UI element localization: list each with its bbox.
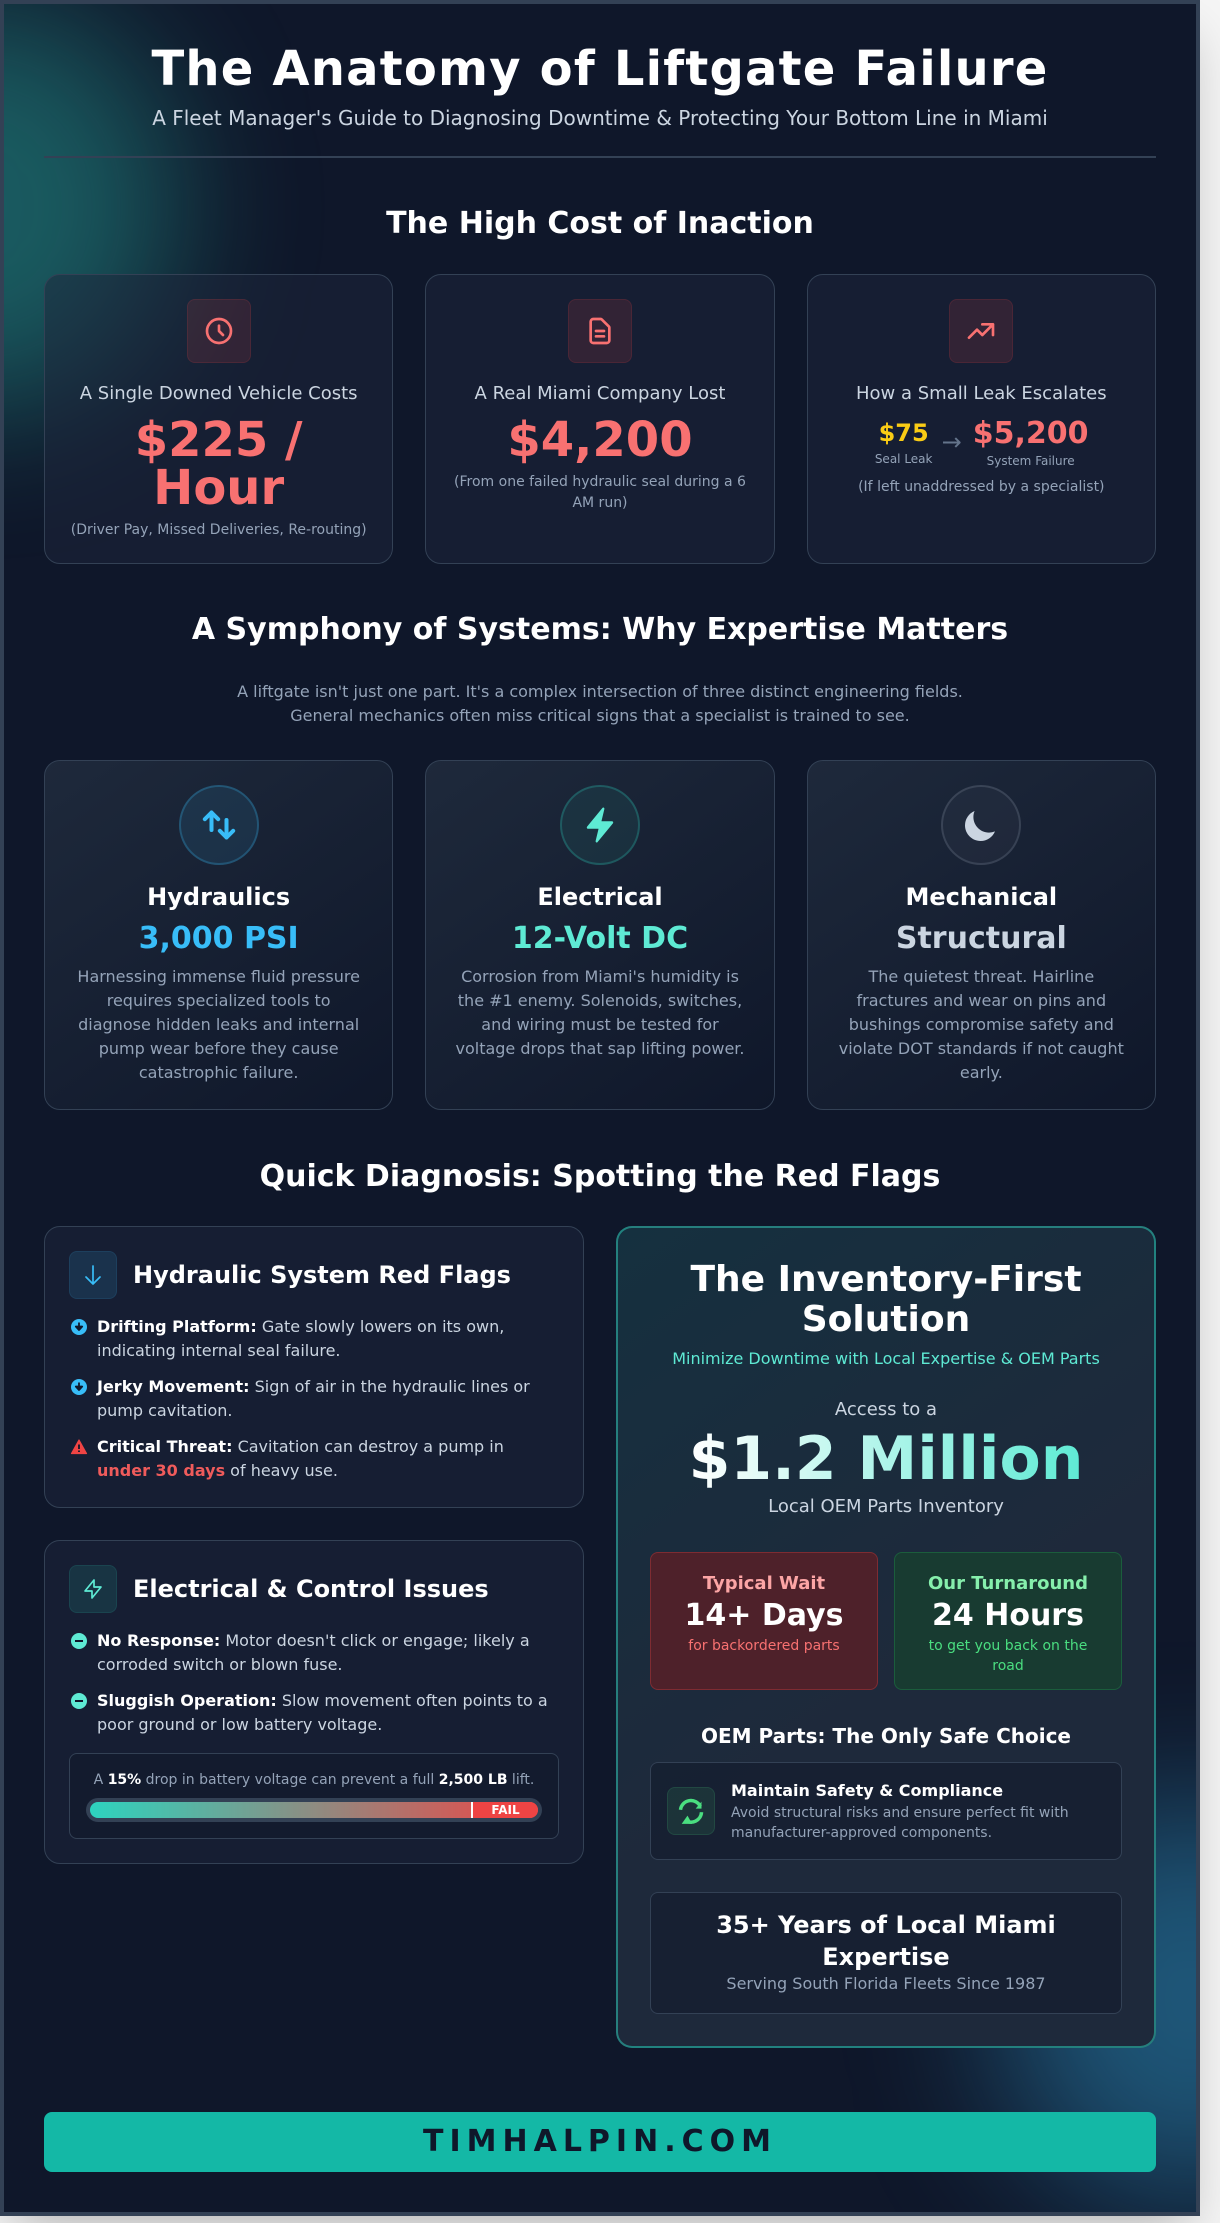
panel: safety and compliance (650, 1762, 1122, 1860)
item title: Maintain Safety & Compliance (731, 1781, 1003, 1800)
figure: system failure: $5,200 (973, 416, 1089, 451)
callout: voltage drop (69, 1753, 559, 1839)
stat value: 14+ Days (685, 1598, 843, 1633)
value: 3,000 PSI (139, 921, 299, 956)
stat value: 24 Hours (932, 1598, 1084, 1633)
heading: symphony: A Symphony of Systems: Why Expertise Matters (192, 612, 1008, 647)
icon: arrow down (69, 1251, 117, 1299)
stat note: to get you back on the road (929, 1638, 1087, 1674)
voltage bar (86, 1798, 542, 1822)
fail zone (471, 1802, 538, 1818)
panel header (69, 1565, 489, 1613)
label: A Real Miami Company Lost (475, 383, 725, 404)
expertise note: Serving South Florida Fleets Since 1987 (726, 1974, 1046, 1993)
heading: high cost: The High Cost of Inaction (386, 206, 814, 241)
icon: bolt outline (69, 1565, 117, 1613)
panel: hydraulics (44, 760, 393, 1110)
stat label: Typical Wait (703, 1573, 825, 1594)
callout text: A 15% drop in battery voltage can prevent a full 2,500 LB lift. (94, 1772, 534, 1788)
panel title: Hydraulic System Red Flags (133, 1261, 511, 1289)
panel: electrical (425, 760, 775, 1110)
figure: seal leak: $75 (879, 419, 929, 447)
escalation figures (875, 416, 1089, 468)
bar fill (90, 1802, 538, 1818)
icon: bolt (560, 785, 640, 865)
OEM heading: OEM Parts: The Only Safe Choice (701, 1724, 1071, 1748)
icon: up down arrows (179, 785, 259, 865)
caption: seal leak: Seal Leak (875, 452, 932, 466)
inventory figure: $1.2 Million (689, 1424, 1083, 1494)
note: (Driver Pay, Missed Deliveries, Re-routing) (71, 522, 367, 538)
figure: $225 / Hour (135, 412, 303, 516)
description: Harnessing immense fluid pressure requires specialized tools to diagnose hidden leaks and internal pump wear before they cause catastrophic failure. (77, 967, 360, 1082)
panel: real company loss (425, 274, 775, 564)
item: no response: No Response: Motor doesn't click or engage; likely a corroded switch or blown fuse. (97, 1631, 530, 1674)
label: A Single Downed Vehicle Costs (80, 383, 358, 404)
figure: $4,200 (507, 412, 693, 468)
icon: clock (187, 299, 251, 363)
solution heading: The Inventory-First Solution (690, 1259, 1082, 1340)
fail zone: FAIL (491, 1803, 520, 1817)
item: jerky movement: Jerky Movement: Sign of air in the hydraulic lines or pump cavitation. (97, 1377, 530, 1420)
intro text: General mechanics often miss critical signs that a specialist is trained to see. (290, 706, 910, 725)
caption: system failure: System Failure (987, 454, 1075, 468)
item description: Avoid structural risks and ensure perfect fit with manufacturer-approved components. (731, 1805, 1069, 1841)
stat: typical wait (650, 1552, 878, 1690)
subtitle: A Fleet Manager's Guide to Diagnosing Downtime & Protecting Your Bottom Line in Miami (152, 106, 1048, 130)
inventory lead-in: Access to a (835, 1399, 937, 1420)
name: Hydraulics (147, 883, 290, 911)
heading: quick diagnosis: Quick Diagnosis: Spotting the Red Flags (260, 1159, 940, 1194)
footer banner (44, 2112, 1156, 2172)
expertise heading: 35+ Years of Local Miami Expertise (716, 1911, 1056, 1971)
inventory caption: Local OEM Parts Inventory (768, 1496, 1004, 1517)
stat label: Our Turnaround (928, 1573, 1088, 1594)
footer banner: TIMHALPIN.COM (423, 2124, 777, 2159)
value: 12-Volt DC (512, 921, 688, 956)
name: Mechanical (906, 883, 1057, 911)
icon: trending up (949, 299, 1013, 363)
panel: downed vehicle cost (44, 274, 393, 564)
item: sluggish operation: Sluggish Operation: Slow movement often points to a poor ground or low battery voltage. (97, 1691, 548, 1734)
name: Electrical (537, 883, 663, 911)
description: Corrosion from Miami's humidity is the #1 enemy. Solenoids, switches, and wiring must be tested for voltage drops that sap lifting power. (455, 967, 744, 1058)
panel: mechanical (807, 760, 1156, 1110)
header divider (44, 156, 1156, 158)
intro text: A liftgate isn't just one part. It's a complex intersection of three distinct engineering fields. (237, 682, 963, 701)
value: Structural (896, 921, 1067, 956)
solution subtitle: Minimize Downtime with Local Expertise & OEM Parts (672, 1349, 1100, 1368)
intro text (237, 682, 963, 725)
item: critical threat: Critical Threat: Cavitation can destroy a pump in under 30 days of heavy use. (97, 1437, 504, 1480)
panel: leak escalation (807, 274, 1156, 564)
icon: recycle arrows (667, 1787, 715, 1835)
panel: inventory-first solution (616, 1226, 1156, 2048)
icon: moon (941, 785, 1021, 865)
panel: hydraulic red flags (44, 1226, 584, 1508)
panel header (69, 1251, 511, 1299)
description: The quietest threat. Hairline fractures and wear on pins and bushings compromise safety and violate DOT standards if not caught early. (839, 967, 1124, 1082)
arrow: → (942, 428, 962, 456)
icon: document (568, 299, 632, 363)
item: drifting platform: Drifting Platform: Gate slowly lowers on its own, indicating internal seal failure. (97, 1317, 504, 1360)
note: (If left unaddressed by a specialist) (858, 479, 1105, 495)
panel: local expertise (650, 1892, 1122, 2014)
note: (From one failed hydraulic seal during a 6 AM run) (454, 474, 746, 510)
label: How a Small Leak Escalates (856, 383, 1107, 404)
panel title: Electrical & Control Issues (133, 1575, 489, 1603)
stat: our turnaround (894, 1552, 1122, 1690)
stat note: for backordered parts (688, 1638, 840, 1654)
panel: electrical issues (44, 1540, 584, 1864)
title: The Anatomy of Liftgate Failure (151, 41, 1049, 97)
